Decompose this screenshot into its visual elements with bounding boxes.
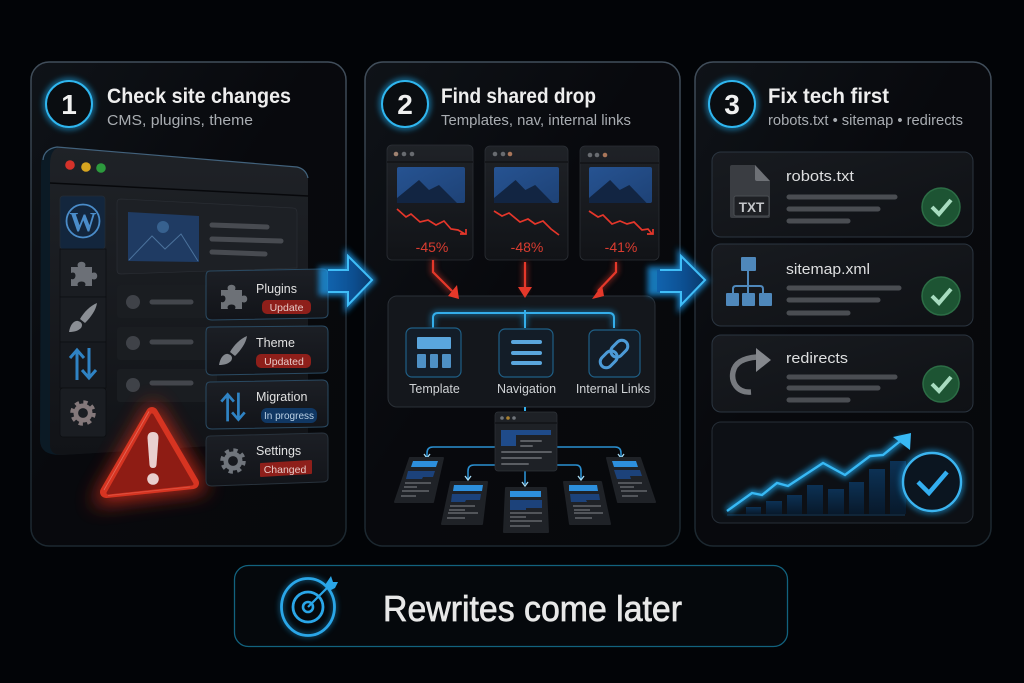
card: redirects bbox=[712, 335, 973, 412]
icon: target bbox=[282, 576, 338, 636]
check badge bbox=[922, 277, 960, 315]
icon: txt file bbox=[730, 165, 770, 218]
badge: Update bbox=[270, 302, 304, 314]
status card: plugins bbox=[206, 269, 328, 320]
icon: sitemap bbox=[726, 257, 772, 306]
heading: Check site changes bbox=[107, 85, 291, 108]
panel: fix tech first bbox=[695, 62, 991, 546]
check badge bbox=[922, 188, 960, 226]
card: redirects: redirects bbox=[786, 350, 848, 367]
trend line bbox=[589, 211, 653, 234]
connector bus bbox=[433, 310, 614, 328]
sidebar icons bbox=[60, 196, 106, 437]
subheading: robots.txt • sitemap • redirects bbox=[768, 112, 963, 129]
step number 1 bbox=[46, 81, 92, 127]
child page 4 bbox=[564, 482, 610, 524]
label: internal links: Internal Links bbox=[576, 382, 650, 396]
page card: -41%: -41% bbox=[605, 239, 637, 255]
card: robots.txt bbox=[712, 152, 973, 237]
card: sitemap.xml: sitemap.xml bbox=[786, 261, 870, 278]
icon: brush bbox=[69, 303, 97, 332]
success badge bbox=[903, 453, 961, 511]
page card: -41% bbox=[580, 146, 659, 260]
child page 2 bbox=[442, 482, 487, 524]
step number 2: 2 bbox=[397, 89, 413, 120]
check badge bbox=[923, 366, 959, 402]
growth line bbox=[727, 433, 911, 511]
callout: rewrites come later bbox=[234, 566, 788, 646]
card: robots.txt: robots.txt bbox=[786, 168, 855, 185]
icon: internal links bbox=[589, 330, 640, 377]
connector to site page bbox=[524, 407, 526, 411]
content card bbox=[117, 199, 297, 274]
page card: -48%: -48% bbox=[511, 239, 543, 255]
icon: arrows bbox=[70, 348, 96, 380]
badge: Changed bbox=[264, 464, 306, 476]
callout text: Rewrites come later bbox=[383, 588, 682, 629]
site connectors bbox=[424, 447, 624, 486]
status card: theme bbox=[206, 326, 328, 375]
shared cause box bbox=[388, 296, 655, 407]
child page 1 bbox=[395, 458, 443, 502]
subheading: Templates, nav, internal links bbox=[441, 112, 631, 129]
icon: gear bbox=[72, 402, 94, 424]
status card: migration bbox=[206, 380, 328, 429]
icon: template bbox=[406, 328, 461, 377]
badge: Updated bbox=[264, 356, 304, 368]
page card: -45% bbox=[387, 145, 473, 260]
step number 3: 3 bbox=[724, 89, 740, 120]
panel: find shared drop bbox=[365, 62, 680, 546]
icon: wordpress: W bbox=[70, 207, 96, 237]
page card: -45%: -45% bbox=[416, 239, 448, 255]
icon: navigation bbox=[499, 329, 553, 377]
warning triangle bbox=[92, 400, 208, 505]
icon: puzzle bbox=[71, 262, 97, 286]
red arrows bbox=[433, 260, 616, 299]
icon: redirect arrow bbox=[733, 348, 771, 392]
list rows bbox=[117, 285, 217, 402]
heading: Fix tech first bbox=[768, 85, 889, 108]
trend line bbox=[397, 209, 466, 234]
trend line bbox=[494, 211, 559, 235]
label: template: Template bbox=[409, 382, 460, 396]
page card: -48% bbox=[485, 146, 568, 260]
icon: txt file: TXT bbox=[739, 200, 765, 215]
subheading: CMS, plugins, theme bbox=[107, 112, 253, 129]
growth chart card bbox=[712, 422, 973, 523]
bars bbox=[746, 461, 906, 514]
status card: settings bbox=[206, 433, 328, 486]
step number 3 bbox=[709, 81, 755, 127]
step number 1: 1 bbox=[61, 89, 77, 120]
status card: theme: Theme bbox=[256, 336, 295, 350]
status card: migration: Migration bbox=[256, 390, 307, 404]
central site page bbox=[495, 412, 557, 471]
badge: In progress bbox=[264, 411, 314, 422]
image placeholder bbox=[128, 212, 199, 262]
step number 2 bbox=[382, 81, 428, 127]
CMS browser window bbox=[40, 147, 308, 455]
flow arrow: step 2 to step 3 bbox=[651, 256, 705, 305]
child page 3 bbox=[504, 488, 548, 532]
heading: Find shared drop bbox=[441, 85, 596, 108]
flow arrow: step 1 to step 2 bbox=[322, 256, 372, 305]
label: navigation: Navigation bbox=[497, 382, 556, 396]
child page 5 bbox=[607, 458, 655, 502]
card: sitemap.xml bbox=[712, 244, 973, 326]
status card: plugins: Plugins bbox=[256, 282, 297, 296]
panel: check site changes bbox=[31, 62, 346, 546]
window controls bbox=[65, 160, 106, 173]
status card: settings: Settings bbox=[256, 444, 301, 458]
